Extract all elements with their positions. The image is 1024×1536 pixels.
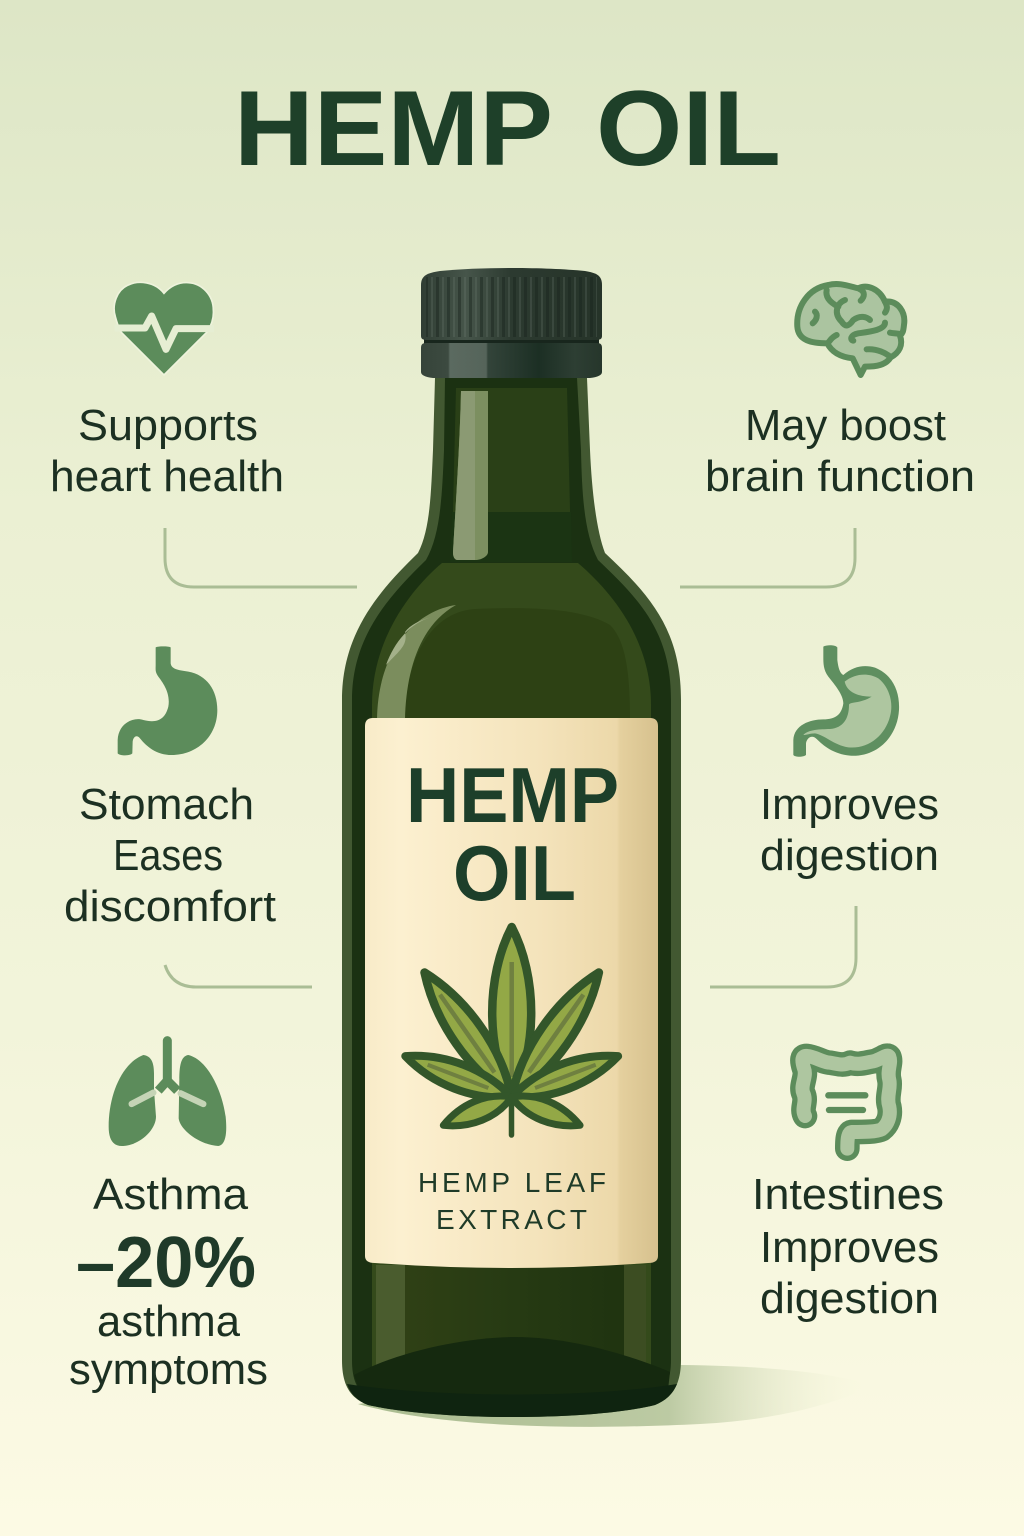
title: OIL (596, 68, 781, 188)
benefit: brain (705, 284, 975, 501)
icon: lungs (109, 1041, 226, 1146)
cap ribbed body (421, 268, 602, 340)
asthma text: Asthma (93, 1170, 249, 1219)
benefit: heart (50, 282, 284, 501)
cap collar (421, 343, 602, 378)
icon: intestines (802, 1056, 890, 1149)
bottle shadow (358, 1365, 872, 1427)
asthma text third line: asthma (97, 1297, 241, 1346)
bottle glass dark layer (352, 378, 671, 1411)
intestines text third line: digestion (760, 1274, 939, 1323)
label paper (365, 718, 658, 1268)
cap gap (424, 336, 599, 346)
bottle base (347, 1384, 677, 1417)
label heading: HEMP (406, 751, 619, 839)
brain text second line: brain function (705, 452, 975, 501)
benefit: stomach (64, 646, 276, 931)
benefit: asthma (69, 1041, 268, 1394)
digestion text: Improves (760, 780, 939, 829)
connector: heart (165, 528, 357, 587)
asthma text fourth line: symptoms (69, 1345, 268, 1394)
leaflet upper right (499, 964, 611, 1106)
title: HEMP (234, 68, 553, 188)
bottle glass outer rim (342, 378, 681, 1417)
leaflet top (492, 927, 531, 1097)
cap ribs (426, 277, 597, 337)
icon: stomach outlined (793, 645, 899, 757)
bottle base dome (354, 1337, 670, 1398)
icon: hemp leaf (401, 927, 623, 1135)
benefit: intestines (752, 1056, 944, 1323)
leaflet bottom left (439, 1088, 516, 1135)
label caption second line: EXTRACT (436, 1204, 587, 1235)
cap (421, 268, 602, 378)
icon: heart with pulse (114, 282, 214, 375)
title (234, 68, 781, 188)
bottle body inner (405, 608, 630, 1395)
bottle (342, 268, 681, 1417)
leaflet lower left (401, 1044, 516, 1109)
stomach text second line: Eases (113, 831, 223, 880)
stomach text third line: discomfort (64, 882, 276, 931)
benefit: digestion (760, 645, 939, 880)
neck highlight (453, 391, 488, 560)
intestines text: Intestines (752, 1170, 944, 1219)
label caption: HEMP LEAF (418, 1167, 606, 1198)
bottle label (365, 718, 658, 1268)
leaflet lower right (507, 1044, 623, 1109)
label heading second line: OIL (453, 829, 576, 917)
lower left reflection (376, 1265, 405, 1380)
neck highlight lighter strip (453, 391, 475, 560)
leaflet upper left (412, 964, 524, 1106)
connector: digestion (710, 906, 856, 987)
leaf stem (509, 1098, 514, 1135)
stomach text: Stomach (79, 780, 254, 829)
leaflet bottom right (508, 1088, 584, 1135)
lower right reflection (624, 1265, 646, 1380)
asthma statistic: –20% (76, 1223, 256, 1303)
icon: stomach solid (118, 646, 217, 755)
bottle neck dark band (450, 512, 572, 562)
bottle shoulder glass (372, 563, 651, 1385)
shoulder highlight (377, 605, 456, 720)
brain text: May boost (745, 401, 946, 450)
shoulder highlight spot (386, 617, 432, 665)
intestines text second line: Improves (760, 1223, 939, 1272)
connector: brain (680, 528, 855, 587)
heart text second line: heart health (50, 452, 284, 501)
connector: stomach (165, 965, 312, 987)
heart text: Supports (78, 401, 258, 450)
digestion text second line: digestion (760, 831, 939, 880)
icon: brain (797, 284, 904, 375)
bottle lower body (405, 1265, 630, 1385)
bottle neck inner (452, 388, 570, 562)
